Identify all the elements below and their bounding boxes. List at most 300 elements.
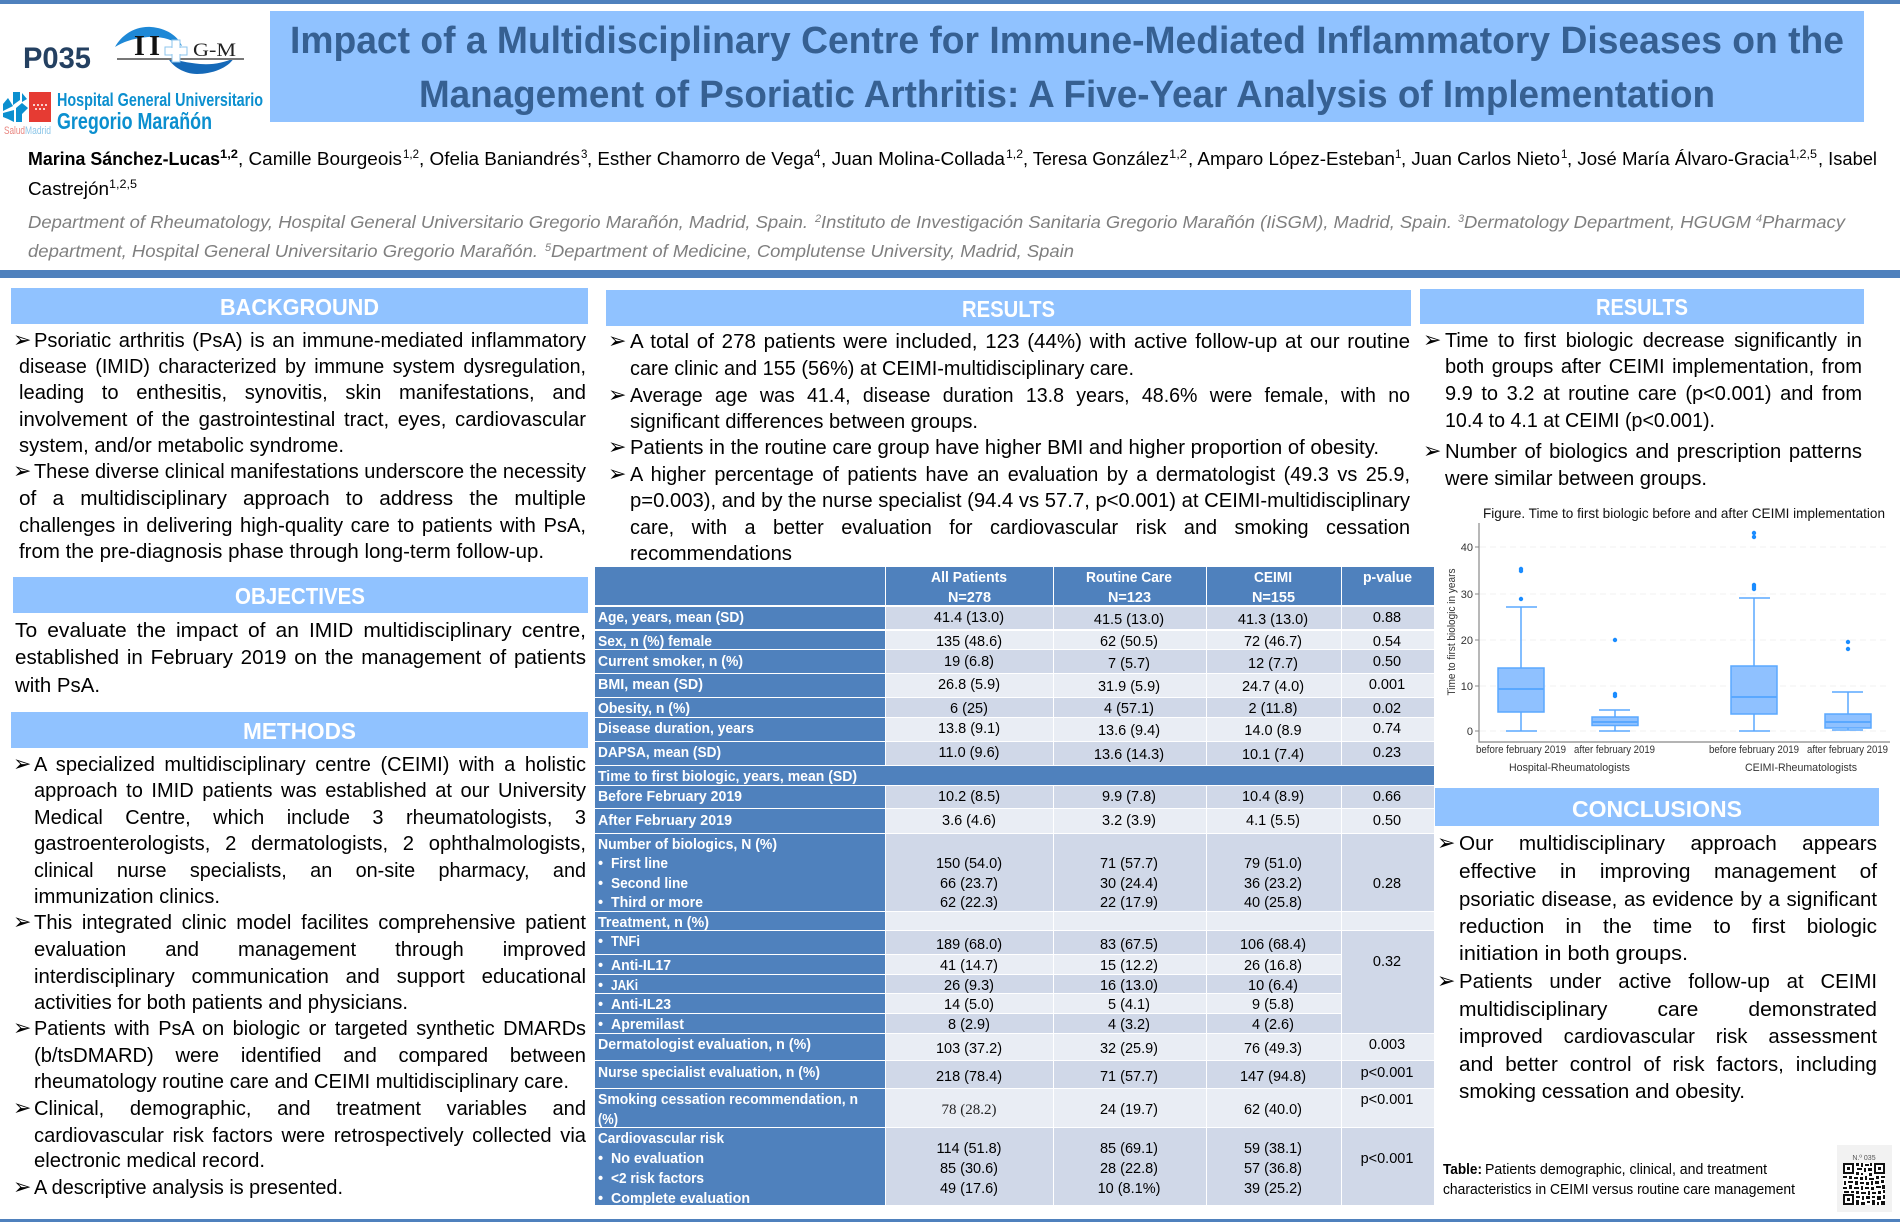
table row labels: Age, years, mean (SD) — [598, 610, 744, 626]
table values: routine care: 5 (4.1) — [1108, 997, 1150, 1013]
table row labels: • — [598, 856, 603, 872]
affiliations: 4 — [1756, 213, 1762, 225]
table row labels: Third or more — [611, 895, 703, 911]
text block: conclusions — [1437, 831, 1877, 1103]
text block: conclusions: and better control of risk factors, including — [1459, 1054, 1877, 1076]
table row labels: JAKi — [611, 978, 638, 994]
table values: p-value: 0.74 — [1373, 721, 1401, 737]
table values: CEIMI: 106 (68.4) — [1240, 937, 1306, 953]
text block: methods: evaluation and management through improved — [34, 939, 586, 961]
affiliations: 5 — [545, 242, 552, 254]
chart title: Figure. Time to first biologic before and after CEIMI implementation — [1483, 505, 1885, 521]
table values: CEIMI: 62 (40.0) — [1244, 1102, 1302, 1118]
table values: all patients: 218 (78.4) — [936, 1069, 1002, 1085]
table header: All Patients — [931, 570, 1007, 586]
text block: methods: A descriptive analysis is presented. — [34, 1177, 343, 1199]
table values: all patients: 19 (6.8) — [944, 654, 994, 670]
table caption: Patients demographic, clinical, and treatment — [1485, 1162, 1767, 1178]
heading: objectives: OBJECTIVES — [235, 583, 365, 609]
table values: routine care: 9.9 (7.8) — [1102, 789, 1156, 805]
table row labels: Cardiovascular risk — [598, 1131, 725, 1147]
authors: , Isabel — [1818, 148, 1877, 169]
table values: routine care: 13.6 (9.4) — [1098, 723, 1160, 739]
table values: CEIMI: 147 (94.8) — [1240, 1069, 1306, 1085]
table values: p-value: 0.28 — [1373, 876, 1401, 892]
logo: Hospital General Universitario Gregorio Marañón — [3, 90, 263, 137]
text block: background: challenges in delivering high-quality care to patients with PsA, — [19, 515, 586, 537]
text block: background: of a multidisciplinary approach to address the multiple — [19, 488, 586, 510]
table values: CEIMI: 72 (46.7) — [1244, 634, 1302, 650]
table values: routine care: 31.9 (5.9) — [1098, 679, 1160, 695]
logo: Hospital General Universitario Gregorio Marañón: Salud — [4, 125, 25, 137]
chart axes: 0 — [1467, 726, 1473, 738]
text block: background: involvement of the gastrointestinal tract, eyes, cardiovascular — [19, 409, 586, 431]
text block: methods: approach to IMID patients was established at our University — [34, 780, 586, 802]
table row labels: • — [598, 1191, 603, 1207]
authors: 1 — [1561, 149, 1567, 161]
text block: conclusions: Our multidisciplinary approach appears — [1459, 833, 1877, 855]
text block: conclusions: reduction in the time to first biologic — [1459, 916, 1877, 938]
chart category labels: before february 2019 — [1476, 744, 1566, 756]
text block: results right: both groups after CEIMI implementation, from — [1445, 356, 1862, 378]
table caption: Table: — [1443, 1162, 1482, 1178]
authors: , Amparo López-Esteban — [1188, 148, 1395, 169]
chart axes: 30 — [1461, 589, 1473, 601]
text block: results: A total of 278 patients were included, 123 (44%) with active follow-up at our routine — [630, 331, 1410, 353]
text block: objectives: To evaluate the impact of an IMID multidisciplinary centre, — [15, 620, 586, 642]
table row labels: • — [598, 895, 603, 911]
table values: CEIMI: 4.1 (5.5) — [1246, 813, 1300, 829]
table row labels: • — [598, 1151, 603, 1167]
table values: all patients: 8 (2.9) — [948, 1017, 990, 1033]
table row labels: • — [598, 934, 603, 950]
table values: routine care: 16 (13.0) — [1100, 978, 1158, 994]
authors: , Juan Carlos Nieto — [1401, 148, 1560, 169]
table values: all patients: 135 (48.6) — [936, 634, 1002, 650]
table row labels: No evaluation — [611, 1151, 704, 1167]
panel: results (centre) — [606, 290, 1411, 565]
table values: all patients: 49 (17.6) — [940, 1181, 998, 1197]
heading: methods: METHODS — [243, 718, 356, 744]
table caption — [1443, 1162, 1795, 1198]
table values: all patients: 103 (37.2) — [936, 1041, 1002, 1057]
chart axes: 10 — [1461, 681, 1473, 693]
table row labels: BMI, mean (SD) — [598, 677, 703, 693]
text block: background: system, and/or metabolic syndrome. — [19, 435, 344, 457]
text block: conclusions: effective in improving management of — [1459, 861, 1877, 883]
text block: background: from the pre-diagnosis phase through long-term follow-up. — [19, 541, 544, 563]
text block: results: ➢ — [608, 329, 626, 354]
table row labels: Sex, n (%) female — [598, 634, 712, 650]
table header: N=155 — [1252, 590, 1295, 606]
table values: all patients: 26.8 (5.9) — [938, 677, 1000, 693]
table row labels: Current smoker, n (%) — [598, 654, 743, 670]
text block: methods: immunization clinics. — [34, 886, 220, 908]
table values: CEIMI: 76 (49.3) — [1244, 1041, 1302, 1057]
table values: CEIMI: 79 (51.0) — [1244, 856, 1302, 872]
table header: N=123 — [1108, 590, 1151, 606]
authors: 3 — [581, 149, 587, 161]
text block: background: ➢ — [13, 328, 31, 353]
table values: p-value: 0.001 — [1369, 677, 1405, 693]
table values: routine care: 30 (24.4) — [1100, 876, 1158, 892]
table values: p-value: 0.50 — [1373, 813, 1401, 829]
table: patient characteristics — [595, 567, 1434, 1207]
panel: background — [11, 288, 588, 563]
table values: CEIMI: 10.4 (8.9) — [1242, 789, 1304, 805]
heading: results: RESULTS — [962, 296, 1055, 322]
table values: p-value: p<0.001 — [1361, 1151, 1413, 1167]
table values: CEIMI — [1238, 612, 1308, 1197]
table values: all patients: 11.0 (9.6) — [938, 745, 1000, 761]
table row labels: Treatment, n (%) — [598, 915, 709, 931]
table values: p-value: p<0.001 — [1361, 1092, 1413, 1108]
table values: routine care: 71 (57.7) — [1100, 856, 1158, 872]
chart category labels — [1476, 744, 1888, 774]
heading: results right: RESULTS — [1596, 294, 1688, 320]
chart category labels: Hospital-Rheumatologists — [1509, 762, 1630, 774]
text block: methods: ➢ — [13, 1016, 31, 1041]
text block: results: significant differences between groups. — [630, 411, 978, 433]
chart category labels: before february 2019 — [1709, 744, 1799, 756]
table values: p-value: 0.50 — [1373, 654, 1401, 670]
table header: N=278 — [948, 590, 991, 606]
table values: all patients: 3.6 (4.6) — [942, 813, 996, 829]
authors: , Juan Molina-Collada — [821, 148, 1006, 169]
chart axes: 20 — [1461, 635, 1473, 647]
logo: IIGM — [115, 27, 244, 74]
text block: conclusions: Patients under active follow-up at CEIMI — [1459, 971, 1877, 993]
table row labels: Obesity, n (%) — [598, 701, 690, 717]
chart category labels: after february 2019 — [1574, 744, 1655, 756]
text block: methods: rheumatology routine care and CEIMI multidisciplinary care. — [34, 1071, 569, 1093]
heading: results right — [1420, 289, 1864, 324]
table values: p-value: 0.54 — [1373, 634, 1401, 650]
text block: methods: electronic medical record. — [34, 1150, 265, 1172]
table values: all patients — [934, 610, 1004, 1197]
authors: 1,2 — [1169, 149, 1187, 161]
table values: routine care: 24 (19.7) — [1100, 1102, 1158, 1118]
text block: methods: activities for both patients and physicians. — [34, 992, 408, 1014]
text block: background: ➢ — [13, 459, 31, 484]
table values: routine care: 32 (25.9) — [1100, 1041, 1158, 1057]
text block: results: Average age was 41.4, disease duration 13.8 years, 48.6% were female, with no — [630, 385, 1410, 407]
table row labels: Second line — [611, 876, 688, 892]
table row labels: Disease duration, years — [598, 721, 754, 737]
table row labels: • — [598, 997, 603, 1013]
affiliations: 3 — [1458, 213, 1465, 225]
table values: p-value: 0.66 — [1373, 789, 1401, 805]
authors: 1,2 — [220, 149, 238, 161]
panel: methods — [11, 712, 588, 1200]
text block: methods: interdisciplinary communication and support educational — [34, 966, 586, 988]
text block: results right: 10.4 to 4.1 at CEIMI (p<0.001). — [1445, 410, 1715, 432]
table values: routine care: 28 (22.8) — [1100, 1161, 1158, 1177]
authors: , José María Álvaro-Gracia — [1567, 148, 1790, 169]
text block: objectives: established in February 2019 on the management of patients — [15, 647, 586, 669]
authors: 1,2,5 — [1789, 149, 1817, 161]
authors: Marina Sánchez-Lucas — [28, 148, 220, 169]
affiliations: Department of Rheumatology, Hospital General Universitario Gregorio Marañón, Madrid, Spain. — [28, 212, 808, 232]
text block: methods: gastroenterologists, 2 dermatologists, 2 ophthalmologists, — [34, 833, 586, 855]
panel: results (right) — [1420, 289, 1864, 490]
authors: 4 — [814, 149, 821, 161]
logo: Hospital General Universitario Gregorio Marañón: Madrid — [25, 125, 51, 137]
affiliations: Department of Medicine, Complutense University, Madrid, Spain — [551, 241, 1074, 261]
table values: routine care: 83 (67.5) — [1100, 937, 1158, 953]
text block: methods: This integrated clinic model facilites comprehensive patient — [34, 912, 586, 934]
text block: conclusions: ➢ — [1437, 969, 1455, 994]
title banner: Management of Psoriatic Arthritis: A Five-Year Analysis of Implementation — [419, 74, 1715, 116]
text block: results: care clinic and 155 (56%) at CEIMI-multidisciplinary care. — [630, 358, 1134, 380]
heading: objectives — [13, 577, 588, 613]
table values: p-value: 0.02 — [1373, 701, 1401, 717]
affiliations: Pharmacy — [1762, 212, 1846, 232]
table values: all patients: 41 (14.7) — [940, 958, 998, 974]
affiliations: Instituto de Investigación Sanitaria Gregorio Marañón (IiSGM), Madrid, Spain. — [821, 212, 1452, 232]
table values: routine care: 4 (3.2) — [1108, 1017, 1150, 1033]
table values: all patients: 14 (5.0) — [944, 997, 994, 1013]
text block: results: ➢ — [608, 435, 626, 460]
text block: results: A higher percentage of patients have an evaluation by a dermatologist (49.3 vs 25.9, — [630, 464, 1410, 486]
panel: objectives — [13, 577, 588, 697]
table values: routine care: 71 (57.7) — [1100, 1069, 1158, 1085]
table values: routine care: 3.2 (3.9) — [1102, 813, 1156, 829]
text block: results: recommendations — [630, 543, 792, 565]
authors: 1 — [1395, 149, 1401, 161]
heading: background: BACKGROUND — [220, 294, 379, 320]
text block: conclusions: multidisciplinary care demonstrated — [1459, 999, 1877, 1021]
table values: all patients: 41.4 (13.0) — [934, 610, 1004, 626]
text block: results right — [1423, 328, 1862, 490]
text block: methods — [13, 752, 587, 1200]
chart axes: Time to first biologic in years — [1446, 568, 1458, 696]
box: hospital after — [1592, 638, 1638, 731]
box: hospital before — [1498, 567, 1544, 731]
table values: CEIMI: 36 (23.2) — [1244, 876, 1302, 892]
QR code — [1837, 1145, 1892, 1212]
table row labels: (%) — [598, 1112, 618, 1128]
title banner — [270, 11, 1864, 122]
table values: all patients: 114 (51.8) — [936, 1141, 1002, 1157]
table values: CEIMI: 57 (36.8) — [1244, 1161, 1302, 1177]
heading: methods — [11, 712, 588, 748]
table values: all patients: 6 (25) — [950, 701, 988, 717]
table header: p-value — [1363, 570, 1412, 586]
table row labels: TNFi — [611, 934, 640, 950]
table row labels: • — [598, 978, 603, 994]
table row labels: Complete evaluation — [611, 1191, 750, 1207]
table row labels: <2 risk factors — [611, 1171, 704, 1187]
heading: background — [11, 288, 588, 324]
text block: conclusions: initiation in both groups. — [1459, 943, 1688, 965]
QR code: N.º 035 — [1852, 1155, 1876, 1162]
table row labels: Anti-IL17 — [611, 958, 671, 974]
logo: Hospital General Universitario Gregorio Marañón: Hospital General Universitario — [57, 90, 263, 110]
table row labels: Dermatologist evaluation, n (%) — [598, 1037, 811, 1053]
text block: results right: ➢ — [1423, 328, 1441, 353]
text block: background: leading to enthesitis, synovitis, skin manifestations, and — [19, 382, 586, 404]
text block: background: Psoriatic arthritis (PsA) is an immune-mediated inflammatory — [34, 330, 586, 352]
text block: methods: Clinical, demographic, and treatment variables and — [34, 1098, 586, 1120]
text block: conclusions: ➢ — [1437, 831, 1455, 856]
table row shading — [595, 567, 1434, 1205]
affiliations: department, Hospital General Universitario Gregorio Marañón. — [28, 241, 538, 261]
text block: methods: (b/tsDMARD) were identified and compared between — [34, 1045, 586, 1067]
table row labels: Anti-IL23 — [611, 997, 671, 1013]
panel: conclusions — [1435, 788, 1879, 1103]
text block: conclusions: improved cardiovascular risk assessment — [1459, 1026, 1877, 1048]
authors: 1,2 — [1006, 149, 1023, 161]
table values: CEIMI: 10 (6.4) — [1248, 978, 1298, 994]
text block: methods: cardiovascular risk factors were retrospectively collected via — [34, 1125, 587, 1147]
text block: conclusions: psoriatic disease, as evidence by a significant — [1459, 889, 1877, 911]
text block: results: p=0.003), and by the nurse specialist (94.4 vs 57.7, p<0.001) at CEIMI-multidisciplinary — [630, 490, 1410, 512]
authors: , Ofelia Baniandrés — [419, 148, 580, 169]
logo: IIGM: II — [134, 31, 160, 62]
chart axes: 40 — [1461, 542, 1473, 554]
table row labels: First line — [611, 856, 668, 872]
table values: CEIMI: 26 (16.8) — [1244, 958, 1302, 974]
table row labels: • — [598, 1017, 603, 1033]
table values: routine care: 41.5 (13.0) — [1094, 612, 1164, 628]
authors — [28, 148, 1877, 199]
text block: methods: ➢ — [13, 1175, 31, 1200]
authors: , Camille Bourgeois — [238, 148, 402, 169]
table values: all patients: 150 (54.0) — [936, 856, 1002, 872]
text block: results right: Number of biologics and prescription patterns — [1445, 441, 1862, 463]
text block: results: care, with a better evaluation for cardiovascular risk and smoking cessation — [630, 517, 1410, 539]
table values: CEIMI: 40 (25.8) — [1244, 895, 1302, 911]
table values: routine care — [1094, 612, 1164, 1197]
text block: results — [608, 329, 1410, 565]
table values: routine care: 10 (8.1%) — [1098, 1181, 1160, 1197]
text block: background: disease (IMID) characterized by immune system dysregulation, — [19, 356, 586, 378]
authors: 1,2,5 — [109, 179, 137, 191]
table values: p-value: p<0.001 — [1361, 1065, 1413, 1081]
table header — [595, 567, 1434, 606]
table values: all patients: 13.8 (9.1) — [938, 721, 1000, 737]
table row labels: • — [598, 876, 603, 892]
chart axes — [1446, 523, 1890, 742]
table header: CEIMI — [1254, 570, 1292, 586]
text block: methods: ➢ — [13, 752, 31, 777]
table values: all patients: 78 (28.2) — [942, 1102, 996, 1118]
table values: routine care: 7 (5.7) — [1108, 656, 1150, 672]
table values: p-value: 0.32 — [1373, 954, 1401, 970]
chart category labels: after february 2019 — [1807, 744, 1888, 756]
table row labels: Nurse specialist evaluation, n (%) — [598, 1065, 820, 1081]
table values: routine care: 13.6 (14.3) — [1094, 747, 1164, 763]
table caption: characteristics in CEIMI versus routine care management — [1443, 1182, 1795, 1198]
table values: CEIMI: 2 (11.8) — [1249, 701, 1297, 717]
box: CEIMI after — [1825, 640, 1871, 730]
table values: CEIMI: 4 (2.6) — [1252, 1017, 1294, 1033]
table values: CEIMI: 59 (38.1) — [1244, 1141, 1302, 1157]
text block: methods: Medical Centre, which include 3 rheumatologists, 3 — [34, 807, 586, 829]
text block: methods: ➢ — [13, 1096, 31, 1121]
table values: routine care: 4 (57.1) — [1104, 701, 1154, 717]
text block: results right: were similar between groups. — [1444, 468, 1707, 490]
table values: all patients: 10.2 (8.5) — [938, 789, 1000, 805]
affiliations — [28, 212, 1846, 261]
text block: methods: Patients with PsA on biologic or targeted synthetic DMARDs — [34, 1018, 586, 1040]
table values: CEIMI: 14.0 (8.9 — [1244, 723, 1302, 739]
table values: p-value: 0.003 — [1369, 1037, 1405, 1053]
logo: IIGM: G-M — [193, 40, 236, 61]
table values: CEIMI: 10.1 (7.4) — [1242, 747, 1304, 763]
table values: all patients: 62 (22.3) — [940, 895, 998, 911]
text block: methods: A specialized multidisciplinary centre (CEIMI) with a holistic — [34, 754, 586, 776]
table values: CEIMI: 39 (25.2) — [1244, 1181, 1302, 1197]
table row labels: • — [598, 958, 603, 974]
text block: background: These diverse clinical manifestations underscore the necessity — [34, 461, 586, 483]
heading: conclusions: CONCLUSIONS — [1572, 796, 1742, 822]
table row labels: Time to first biologic, years, mean (SD) — [598, 769, 857, 785]
table values: CEIMI: 41.3 (13.0) — [1238, 612, 1308, 628]
heading: results — [606, 290, 1411, 326]
affiliations: 2 — [814, 213, 821, 225]
text block: results: ➢ — [608, 383, 626, 408]
chart category labels: CEIMI-Rheumatologists — [1745, 762, 1857, 774]
table values: all patients: 26 (9.3) — [944, 978, 994, 994]
table values: all patients: 189 (68.0) — [936, 937, 1002, 953]
table header: Routine Care — [1086, 570, 1172, 586]
table row labels: Before February 2019 — [598, 789, 742, 805]
table values: p-value: 0.88 — [1373, 610, 1401, 626]
table row labels: • — [598, 1171, 603, 1187]
table values: all patients: 85 (30.6) — [940, 1161, 998, 1177]
table row labels — [598, 610, 858, 1207]
poster number: P035 — [23, 42, 91, 75]
title banner: Impact of a Multidisciplinary Centre for Immune-Mediated Inflammatory Diseases on the — [290, 20, 1844, 62]
text block: results right: ➢ — [1423, 439, 1441, 464]
table row labels: Smoking cessation recommendation, n — [598, 1092, 858, 1108]
authors: , Teresa González — [1023, 148, 1169, 169]
table values: CEIMI: 12 (7.7) — [1248, 656, 1298, 672]
logo: Hospital General Universitario Gregorio Marañón: Gregorio Marañón — [57, 108, 212, 134]
table values: p-value: 0.23 — [1373, 745, 1401, 761]
text block: results: ➢ — [608, 462, 626, 487]
table values: all patients: 66 (23.7) — [940, 876, 998, 892]
table row labels: After February 2019 — [598, 813, 732, 829]
table values: routine care: 62 (50.5) — [1100, 634, 1158, 650]
text block: background — [13, 328, 586, 563]
text block: results: Patients in the routine care group have higher BMI and higher proportion of obesity. — [630, 437, 1379, 459]
affiliations: Dermatology Department, HGUGM — [1464, 212, 1751, 232]
table values: routine care: 22 (17.9) — [1100, 895, 1158, 911]
table row labels: Number of biologics, N (%) — [598, 837, 777, 853]
text block: objectives — [14, 620, 586, 697]
text block: methods: ➢ — [13, 910, 31, 935]
text block: results right: 9.9 to 3.2 at routine care (p<0.001) and from — [1445, 383, 1862, 405]
text block: results right: Time to first biologic decrease significantly in — [1445, 330, 1862, 352]
text block: objectives: with PsA. — [14, 675, 100, 697]
table row labels: DAPSA, mean (SD) — [598, 745, 721, 761]
box: CEIMI before — [1731, 531, 1777, 731]
heading: conclusions — [1435, 788, 1879, 826]
table values: p-value — [1361, 610, 1413, 1167]
table row labels: Apremilast — [611, 1017, 684, 1033]
chart: time to first biologic boxplot — [1446, 505, 1890, 774]
table values: routine care: 85 (69.1) — [1100, 1141, 1158, 1157]
text block: conclusions: smoking cessation and obesity. — [1459, 1081, 1745, 1103]
table values: routine care: 15 (12.2) — [1100, 958, 1158, 974]
authors: 1,2 — [403, 149, 419, 161]
text block: methods: clinical nurse specialists, an on-site pharmacy, and — [34, 860, 586, 882]
authors: , Esther Chamorro de Vega — [587, 148, 815, 169]
authors: Castrejón — [28, 178, 109, 199]
